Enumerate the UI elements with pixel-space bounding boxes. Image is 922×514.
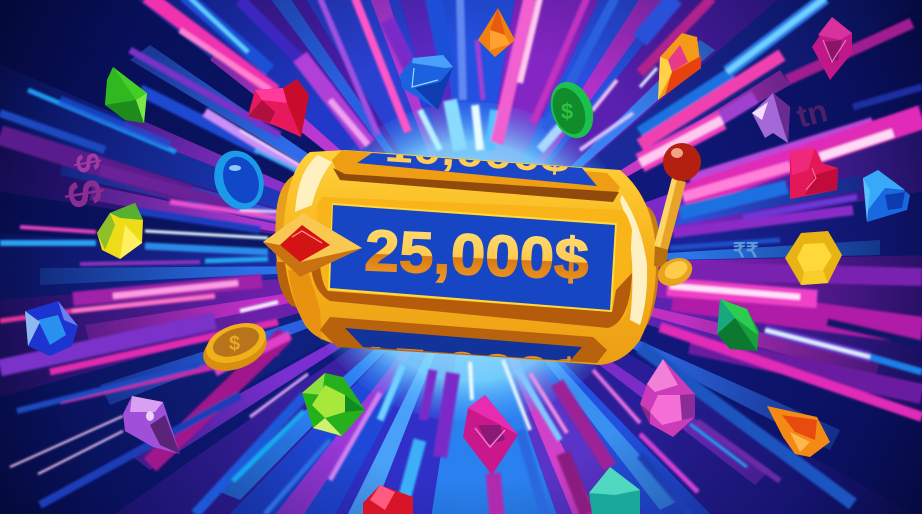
gem: yellow-green bbox=[97, 203, 143, 259]
gem: magenta bottom bbox=[463, 395, 518, 475]
gem: pink bbox=[640, 359, 695, 437]
gem: yellow hexagon bbox=[785, 231, 842, 285]
top bbox=[300, 57, 368, 145]
bottom window glass bbox=[345, 328, 582, 361]
ghost mark upper right: tn bbox=[793, 92, 831, 135]
gem: blue oval bbox=[206, 144, 272, 216]
upper right bbox=[640, 0, 712, 73]
gem: red bottom bbox=[363, 485, 413, 514]
right cap bbox=[620, 203, 659, 342]
ghost dollar left: $ bbox=[55, 176, 112, 211]
top window glass bbox=[357, 153, 597, 186]
gem: green coin: $ bbox=[561, 99, 573, 124]
ghost mark left top: $ bbox=[67, 150, 108, 175]
lower right bbox=[690, 271, 922, 277]
lower left shading bbox=[288, 270, 322, 340]
gem: crimson right bbox=[790, 148, 838, 199]
top window frame bbox=[332, 150, 620, 202]
icon: gold coin bbox=[197, 315, 273, 379]
bottom reel value: 15,000$ bbox=[354, 337, 587, 400]
main window glass bbox=[328, 203, 617, 312]
red pointer bbox=[263, 213, 362, 277]
gem: amber shard bbox=[658, 33, 701, 100]
top reel value: 10,000$ bbox=[383, 126, 571, 182]
right highlight bbox=[620, 195, 647, 325]
icon: gold coin: $ bbox=[229, 333, 240, 355]
bottom window frame bbox=[320, 317, 607, 363]
gem: teal bottom bbox=[589, 467, 640, 514]
gem: green coin bbox=[543, 76, 601, 144]
gem: green top left bbox=[105, 67, 147, 123]
upper left bbox=[0, 135, 190, 195]
lower left bbox=[80, 262, 200, 264]
gem: orange top bbox=[478, 8, 515, 57]
gem: crimson bbox=[248, 79, 309, 137]
slot machine bbox=[263, 143, 701, 365]
gem: blue left bbox=[25, 301, 78, 356]
main frame bbox=[313, 197, 632, 325]
jackpot value: 25,000$ bbox=[363, 218, 590, 292]
ghost mark right: ₹₹ bbox=[733, 240, 759, 262]
gem: blue top bbox=[400, 55, 453, 110]
gem: magenta top right bbox=[812, 17, 852, 80]
ghost currency symbols bbox=[55, 92, 831, 262]
gem: orange lower right bbox=[767, 406, 830, 457]
drum body bbox=[283, 150, 656, 365]
bottom bbox=[423, 370, 433, 420]
lever bbox=[653, 143, 701, 291]
gem: purple lower left bbox=[123, 396, 180, 454]
left highlight bbox=[295, 155, 332, 212]
left cap bbox=[275, 172, 318, 310]
gem: green right bbox=[717, 299, 759, 351]
gem: lilac bbox=[752, 93, 790, 143]
gem: green emerald bbox=[302, 373, 365, 436]
central glow bbox=[300, 102, 640, 422]
gem: blue right bbox=[863, 170, 910, 222]
main frame brown lip bbox=[311, 265, 632, 328]
